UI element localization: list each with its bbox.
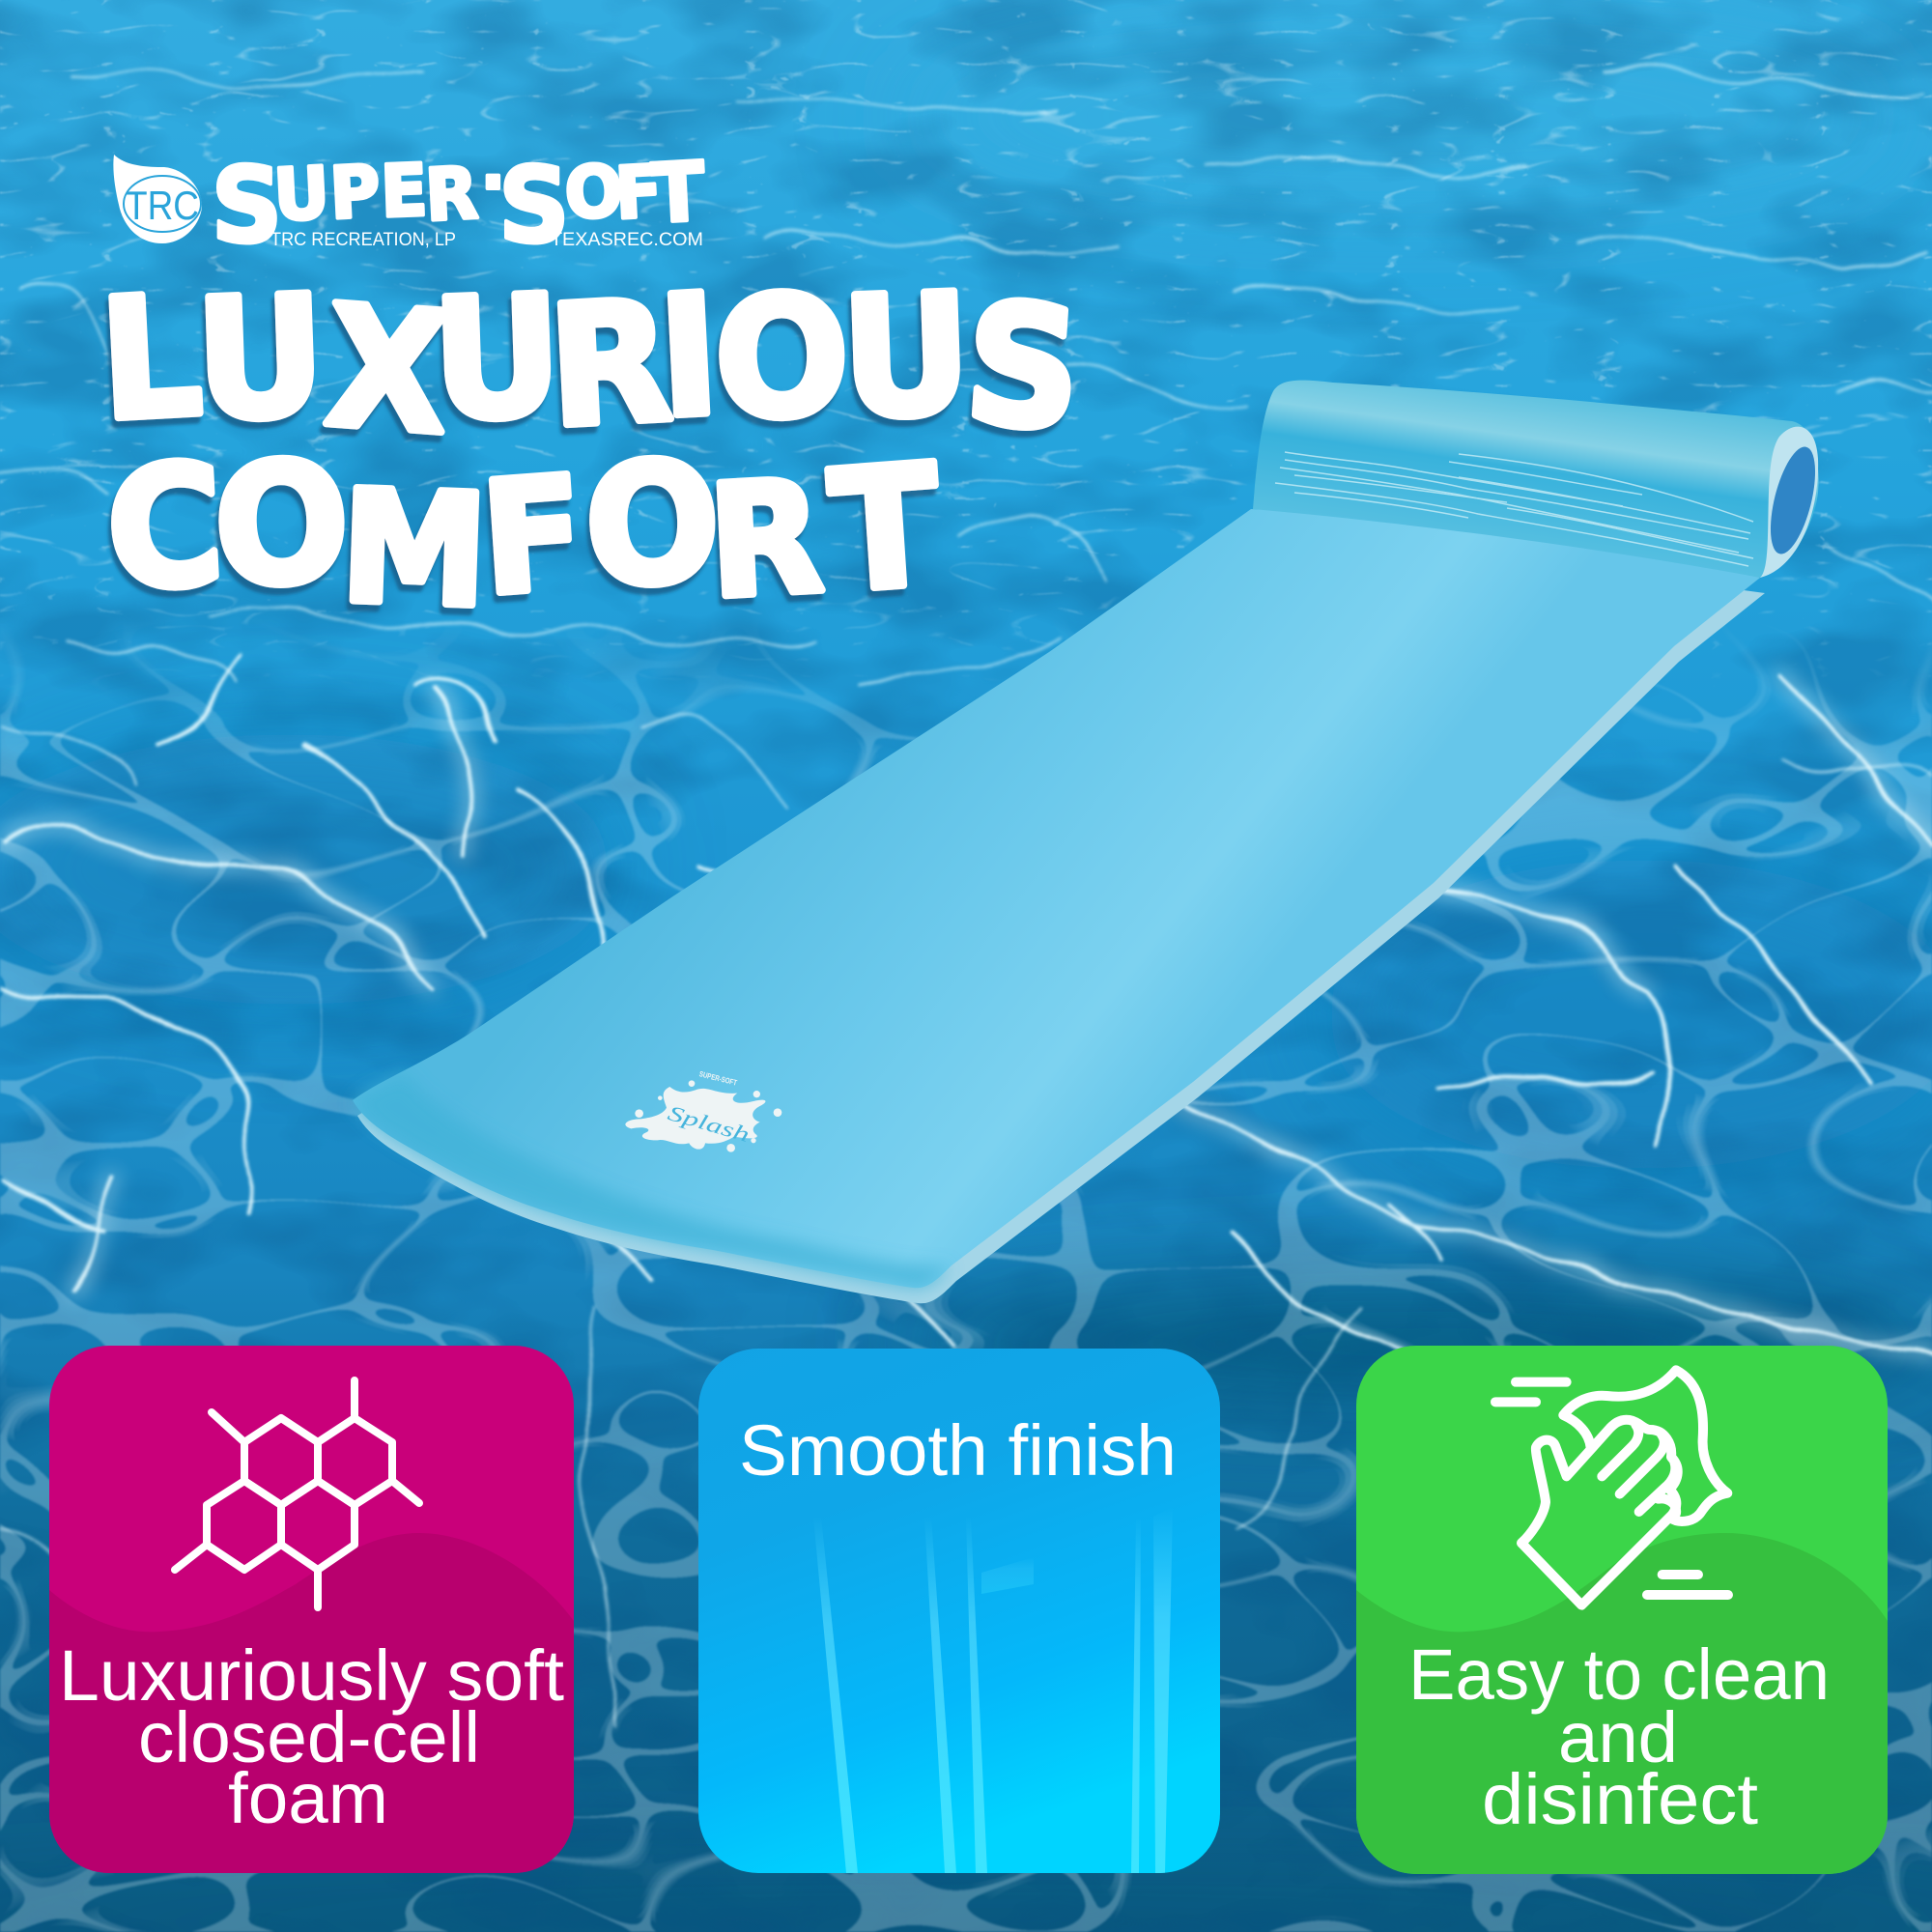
streaks: smooth surface photo bbox=[813, 1507, 1173, 1873]
mat surface bbox=[353, 509, 1760, 1288]
title bbox=[96, 257, 1087, 641]
tagline right: TEXASREC.COM bbox=[551, 230, 703, 250]
title: C bbox=[102, 428, 228, 628]
label: foam bbox=[228, 1758, 388, 1838]
wordmark: Super-Soft: T bbox=[650, 145, 707, 242]
wordmark: Super-Soft: O bbox=[563, 150, 625, 236]
wordmark: Super-Soft: E bbox=[380, 150, 429, 234]
icon: TRC drop: TRC bbox=[126, 183, 199, 228]
label: closed-cell bbox=[138, 1697, 480, 1777]
label: Easy to clean bbox=[1408, 1634, 1830, 1715]
panel: easy to clean bbox=[1356, 1346, 1888, 1874]
label bbox=[1408, 1634, 1830, 1839]
mat: underside edge bbox=[357, 525, 1765, 1303]
panel: closed-cell foam bbox=[49, 1346, 574, 1873]
title: O bbox=[212, 425, 352, 624]
product: floating mat with pillow bbox=[353, 381, 1824, 1288]
title: LUXURIOUS bbox=[96, 257, 1087, 471]
label: disinfect bbox=[1482, 1759, 1758, 1839]
label: Smooth finish bbox=[739, 1410, 1177, 1491]
wordmark: Super-Soft: · bbox=[481, 144, 505, 222]
tagline left: TRC RECREATION, LP bbox=[270, 230, 456, 250]
icon: TRC drop bbox=[113, 155, 202, 243]
title: O bbox=[582, 425, 723, 624]
splash logo: Splash bbox=[666, 1100, 753, 1147]
title: T bbox=[825, 428, 945, 630]
wordmark: Super-Soft: R bbox=[423, 152, 480, 238]
wordmark: Super-Soft: S bbox=[498, 145, 570, 267]
wordmark: Super-Soft bbox=[212, 144, 707, 267]
title: M bbox=[338, 456, 491, 641]
title: F bbox=[477, 442, 589, 630]
wordmark: Super-Soft: U bbox=[272, 152, 331, 238]
label: Luxuriously soft bbox=[59, 1635, 564, 1716]
wordmark: Super-Soft: P bbox=[328, 151, 382, 236]
pillow wrinkles bbox=[1275, 452, 1753, 566]
label: and bbox=[1558, 1697, 1678, 1777]
panel: smooth finish bbox=[698, 1349, 1220, 1873]
splash logo bbox=[625, 1069, 781, 1152]
splash logo: SUPER-SOFT bbox=[698, 1069, 738, 1088]
pillow end cap and hole bbox=[1760, 427, 1818, 578]
icon: honeycomb molecule bbox=[175, 1380, 419, 1607]
brand logo bbox=[113, 144, 707, 267]
front bevel of mat bbox=[353, 1072, 952, 1288]
icon: hand wiping with cloth bbox=[1495, 1370, 1728, 1605]
title: R bbox=[705, 446, 827, 633]
pillow roll bbox=[1253, 381, 1819, 578]
wordmark: Super-Soft: S bbox=[212, 145, 282, 267]
label bbox=[59, 1635, 564, 1838]
wordmark: Super-Soft: F bbox=[613, 151, 664, 236]
